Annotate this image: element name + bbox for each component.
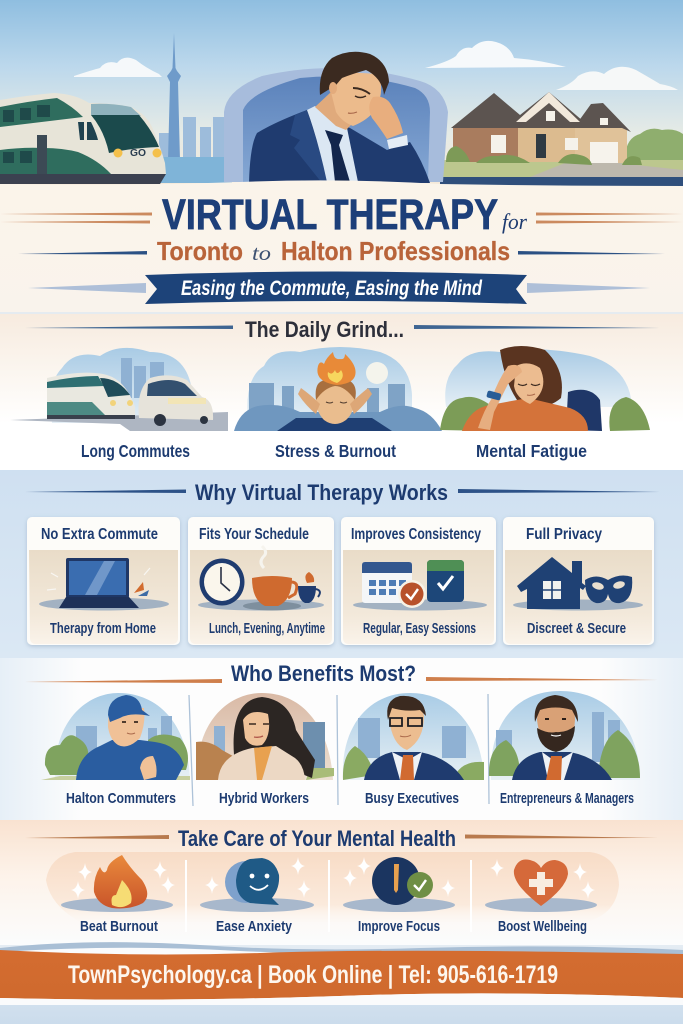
jacket xyxy=(249,110,430,183)
ribbon rules xyxy=(28,283,650,293)
card: improves consistency: Improves Consistency xyxy=(351,526,481,543)
cloud: centre xyxy=(425,41,566,68)
card: no extra commute: Therapy from Home xyxy=(50,621,156,637)
card: improves consistency xyxy=(341,517,496,645)
trees right xyxy=(625,129,683,160)
illustration: stress and burnout xyxy=(234,347,442,431)
column dividers xyxy=(189,694,489,806)
hand xyxy=(369,97,403,139)
header wave xyxy=(0,180,683,200)
section rules xyxy=(25,834,658,839)
section heading: Take Care of Your Mental Health xyxy=(178,826,456,851)
ribbon banner xyxy=(145,272,527,304)
title rules: orange xyxy=(0,212,683,224)
label: improve focus: Improve Focus xyxy=(358,918,440,935)
label: ease anxiety: Ease Anxiety xyxy=(216,918,293,935)
wellness band xyxy=(46,852,619,922)
subtitle: to: to xyxy=(252,241,271,265)
subtitle: Toronto: Toronto xyxy=(157,236,243,266)
lake water xyxy=(160,157,232,183)
card: fits your schedule: Lunch, Evening, Anytime xyxy=(209,621,325,637)
CN Tower xyxy=(167,33,181,160)
label: hybrid workers: Hybrid Workers xyxy=(219,790,309,807)
label: stress and burnout: Stress & Burnout xyxy=(275,441,396,461)
title word: for: for xyxy=(502,209,527,234)
illustration: mental fatigue xyxy=(440,346,650,431)
lawn and driveway xyxy=(443,160,683,177)
card: improves consistency: Regular, Easy Sessions xyxy=(363,621,476,637)
icon: smiling chat bubble xyxy=(200,857,314,912)
card: fits your schedule: Fits Your Schedule xyxy=(199,526,309,543)
card: no extra commute xyxy=(27,517,180,645)
section rules xyxy=(25,325,660,329)
cloud: right xyxy=(556,67,678,90)
ear xyxy=(329,82,337,94)
train xyxy=(0,93,166,184)
flame xyxy=(317,352,356,385)
section heading: The Daily Grind... xyxy=(245,317,404,342)
section heading: Who Benefits Most? xyxy=(231,661,416,686)
icon: focus clock xyxy=(343,857,455,912)
footer xyxy=(0,942,683,1024)
label: Halton commuters: Halton Commuters xyxy=(66,790,176,807)
panel: take care of your mental health xyxy=(0,820,683,945)
sub title rules: blue xyxy=(18,251,665,254)
icon: flame xyxy=(61,855,175,912)
section rules xyxy=(25,489,660,493)
tie xyxy=(325,130,350,182)
icon: heart with plus xyxy=(485,859,597,912)
panel: why virtual therapy works xyxy=(0,470,683,658)
panel: who benefits most xyxy=(0,658,683,820)
card: full privacy: Full Privacy xyxy=(526,526,602,543)
stressed figure xyxy=(277,378,392,431)
facial details xyxy=(348,88,370,113)
label: boost wellbeing: Boost Wellbeing xyxy=(498,918,587,935)
card: fits your schedule xyxy=(188,517,334,645)
Toronto skyline xyxy=(159,117,225,173)
label: busy executives: Busy Executives xyxy=(365,790,459,807)
section rules xyxy=(25,677,658,683)
portrait: entrepreneur and manager xyxy=(489,691,640,780)
man in suit, tired xyxy=(249,52,430,183)
label: beat burnout: Beat Burnout xyxy=(80,918,158,935)
card: full privacy: Discreet & Secure xyxy=(527,621,626,637)
panel: the daily grind xyxy=(0,312,683,470)
ribbon banner: Easing the Commute, Easing the Mind xyxy=(181,277,483,300)
label: mental fatigue: Mental Fatigue xyxy=(476,441,587,461)
shirt cuff xyxy=(387,135,408,149)
face xyxy=(331,72,381,126)
portrait: hybrid worker xyxy=(196,693,334,780)
seat back xyxy=(224,68,448,182)
icon: house and mask xyxy=(513,557,643,610)
train xyxy=(47,373,135,419)
train GO logo: GO xyxy=(130,148,146,159)
car xyxy=(138,375,213,426)
main title: VIRTUAL THERAPY xyxy=(162,191,498,239)
portrait: Halton commuter xyxy=(41,693,190,780)
lapel shading xyxy=(290,110,330,183)
contact banner xyxy=(0,950,683,1000)
hair xyxy=(320,52,389,95)
title panel xyxy=(0,190,683,312)
card: no extra commute: No Extra Commute xyxy=(41,526,158,543)
icon: calendars xyxy=(353,560,487,610)
icon: clock and coffee xyxy=(198,546,324,610)
cloud: left xyxy=(74,58,162,77)
illustration: long commutes xyxy=(10,348,228,431)
icon: laptop xyxy=(39,558,169,610)
section heading: Why Virtual Therapy Works xyxy=(195,480,448,505)
hero illustration: commuter between train and home xyxy=(0,0,683,200)
road under scene xyxy=(440,177,683,190)
label: long commutes: Long Commutes xyxy=(81,441,190,461)
neck xyxy=(315,92,352,130)
contact banner: TownPsychology.ca | Book Online | Tel: 905-616-1719 xyxy=(68,961,558,989)
subtitle: Halton Professionals: Halton Professionals xyxy=(281,236,510,266)
shirt xyxy=(307,106,358,182)
column dividers xyxy=(186,860,471,932)
house xyxy=(446,92,642,165)
card: full privacy xyxy=(503,517,654,645)
portrait: busy executive xyxy=(343,693,484,780)
